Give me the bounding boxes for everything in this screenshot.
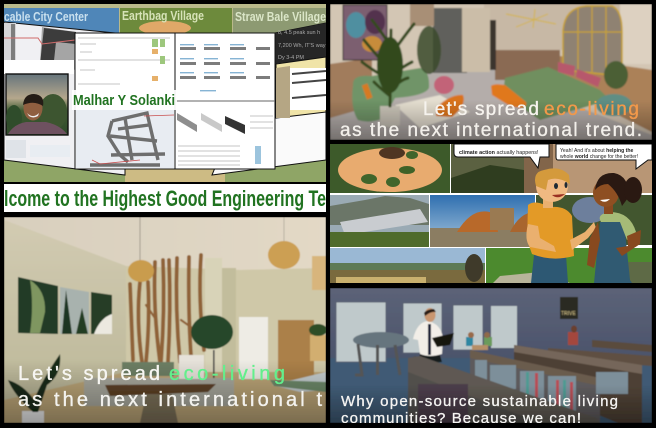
triptych wall art [18,277,112,334]
left wall [4,220,126,400]
panel: living room with branch wall [4,217,327,423]
speech bubble: helping the world: Yeah! And it's about helping the [560,148,633,154]
rattan pendant lights [128,217,300,282]
document right: beam specifications [175,33,275,169]
floor [4,372,326,423]
speech bubble: climate action [454,144,549,168]
wall poster: TRIVE [561,311,576,317]
comic character: girl [587,173,642,283]
bedroom scene [330,4,652,140]
pink pouf [434,76,454,94]
chandelier [506,9,556,28]
floor [330,66,652,140]
wall poster [560,297,578,319]
speech bubble: helping the world [556,144,652,169]
living room scene [4,217,327,423]
sofa and wood table [84,355,326,423]
name caption: Malhar Y Solanki [73,92,175,109]
branch wall [130,255,204,362]
wall art [343,5,387,60]
speech bubble: climate action: climate action actually happens! [459,150,539,156]
panel: engineering team collage [4,4,326,182]
icon: pipe frame model [90,113,165,165]
panel: library [330,288,652,427]
arched mirror [563,6,622,76]
caption [341,393,618,427]
windows [336,302,517,362]
doorway [410,4,496,73]
headline: eco-living: as the next international t [18,389,322,411]
caption: communities? Because we can! [341,410,581,427]
ceiling [4,217,326,270]
panel: bedroom eco-living [330,4,652,141]
headline: eco-living [18,363,322,411]
building render: earth dome [430,195,535,247]
map tile: Earthbag Village: Earthbag Village [122,8,204,23]
greenhouse tile [451,144,524,193]
landscape render [330,248,485,283]
green garden render [536,195,652,245]
map tile: Earthbag Village [120,8,232,35]
fiddle leaf plant [191,315,233,386]
comic character: boy [526,168,596,283]
green sofa [352,68,429,122]
potted palm [362,20,441,127]
headline: eco-living: Let's spread [18,363,160,385]
tilted document right: 7,200 Wh, IT'S way [278,43,326,49]
tilted document right [212,23,326,175]
sand tile [553,144,652,193]
map tile: Straw Bale Village: Straw Bale Village [235,9,326,24]
portrait photo [6,74,68,135]
floor [330,358,652,423]
bed [503,61,632,120]
tilted document left [4,22,125,175]
rug [395,95,470,128]
headline: eco-living [340,100,640,136]
wall panelling [330,48,652,132]
welcome banner: lcome to the Highest Good Engineering Te [4,186,326,211]
orange chair [436,95,464,117]
building render: terraced [330,195,429,247]
map tile: Straw Bale Village [233,8,326,34]
map tile: Livable City Center [4,8,119,34]
seated reader [568,326,578,345]
document center: solar tables and frame model [75,33,175,169]
speech bubble: helping the world: whole world change for the better! [560,154,638,160]
tilted document right: Dy 3-4 PM [278,55,304,61]
headline: eco-living: eco-living [169,363,285,385]
headline: eco-living: Let's spread [423,99,539,120]
bookshelves [408,340,652,423]
children at table [466,332,492,350]
potted plant left [8,354,60,423]
library scene [330,288,652,423]
wooden wardrobe [278,256,327,380]
map tile: Livable City Center: cable City Center [4,9,88,24]
back wall [126,266,326,380]
caption: Why open-source sustainable living [341,393,618,410]
welcome banner [4,184,326,212]
headline: eco-living: as the next international trend. [340,120,642,141]
meadow render [486,248,652,283]
panel: comic and village renders [330,144,652,283]
headline: eco-living: eco-living [544,99,639,120]
man reading [413,308,454,364]
village aerial [330,144,450,193]
round table [353,332,409,375]
orange bench [491,84,526,108]
white door [239,317,268,379]
tilted document right: 8, 4.5 peak sun h [278,30,320,36]
